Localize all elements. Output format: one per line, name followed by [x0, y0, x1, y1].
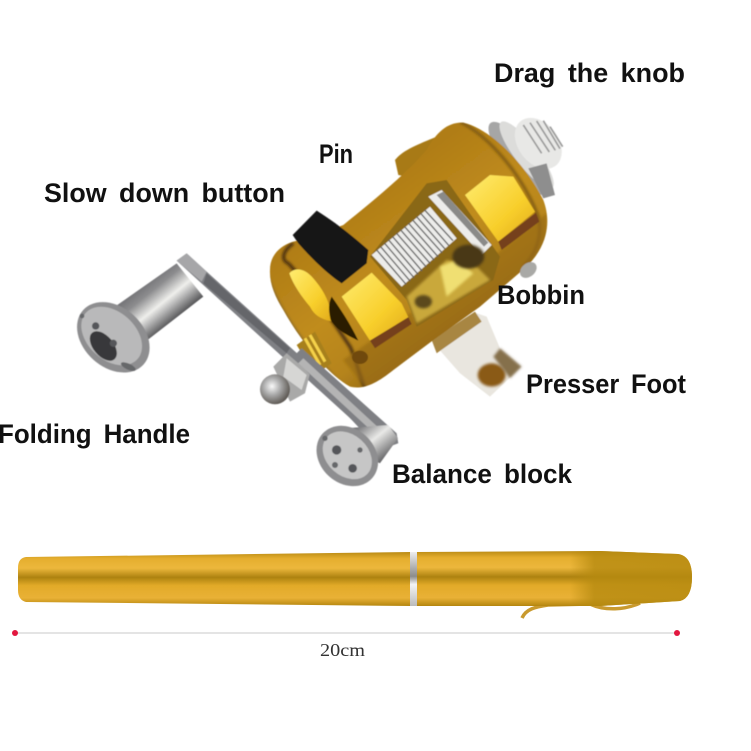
label: Balance block: Balance block	[392, 459, 573, 489]
drag knob	[480, 109, 572, 202]
label: Slow down button: Slow down button	[44, 178, 285, 208]
axle spring	[297, 332, 332, 375]
infographic canvas	[0, 62, 692, 656]
pen lower section	[18, 552, 411, 606]
upper grip cap	[63, 288, 164, 387]
label: Bobbin: Bobbin	[497, 280, 585, 310]
label: Drag the knob: Drag the knob	[494, 58, 685, 88]
reel body	[260, 109, 572, 397]
slow down button	[293, 211, 368, 283]
size scale	[12, 630, 680, 660]
balance block	[304, 413, 398, 499]
label: Folding Handle: Folding Handle	[0, 419, 190, 449]
bobbin coil	[372, 207, 457, 287]
pin bracket	[395, 123, 487, 180]
shell highlights	[289, 269, 333, 322]
cap nut	[260, 353, 310, 404]
pen upper section	[416, 551, 692, 606]
size label: 20cm	[320, 640, 365, 660]
upper grip cylinder	[115, 263, 203, 343]
silver band	[410, 552, 417, 606]
pen clip	[522, 603, 640, 618]
closed pen rod	[18, 551, 692, 618]
lower arm and balance block	[293, 348, 398, 499]
pen end cap shading	[570, 551, 692, 606]
spool window	[370, 180, 500, 327]
label: Presser Foot: Presser Foot	[526, 369, 686, 399]
body shell	[260, 122, 547, 393]
scale end point right	[674, 630, 680, 636]
label: Pin: Pin	[319, 139, 353, 169]
shell bottom dome shading	[270, 280, 346, 384]
foot	[432, 312, 522, 397]
scale end point left	[12, 630, 18, 636]
folding handle upper	[63, 253, 362, 423]
reel illustration	[63, 109, 572, 499]
handle arm	[177, 253, 362, 423]
